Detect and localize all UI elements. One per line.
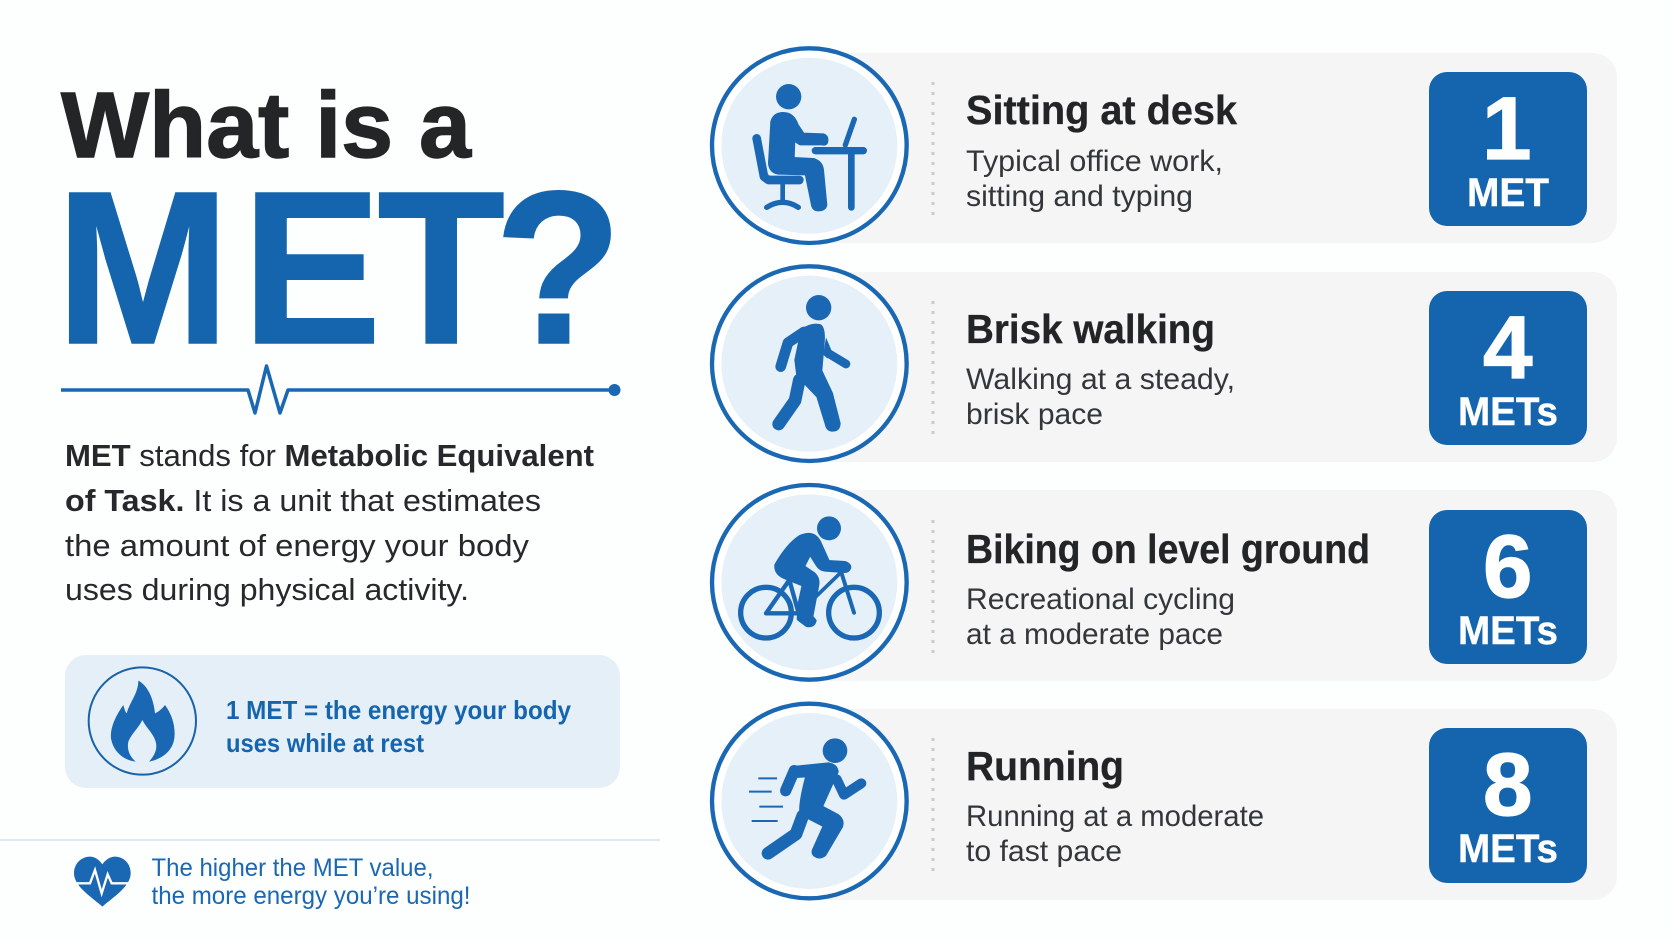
activity description: Running at a moderate xyxy=(966,800,1264,833)
activity description: Walking at a steady, xyxy=(966,363,1235,396)
footer note xyxy=(152,854,470,910)
MET badge: 1: 1 xyxy=(1482,78,1532,178)
MET badge: 1 xyxy=(1429,72,1587,226)
icon: runner xyxy=(712,704,907,898)
MET badge: 8: METs xyxy=(1458,827,1558,871)
MET badge: 4 xyxy=(1429,291,1587,445)
heartbeat divider xyxy=(61,366,620,413)
panel: biking on level ground xyxy=(712,485,1617,681)
activity title: Biking on level ground xyxy=(966,526,1370,572)
icon: cyclist xyxy=(712,485,907,680)
intro text block: of Task. It is a unit that estimates xyxy=(65,483,541,518)
MET badge: 4: 4 xyxy=(1483,297,1533,397)
intro text block: uses during physical activity. xyxy=(65,572,469,607)
panel: sitting at desk xyxy=(712,48,1617,243)
activity title: Brisk walking xyxy=(966,306,1215,352)
activity title: Sitting at desk xyxy=(966,87,1237,133)
activity description xyxy=(966,800,1264,868)
MET badge: 8 xyxy=(1429,728,1587,883)
panel: brisk walking xyxy=(712,266,1617,462)
MET badge: 6: 6 xyxy=(1483,516,1532,616)
icon: person at desk xyxy=(712,48,907,243)
icon: flame xyxy=(89,667,196,775)
callout panel: 1 MET definition xyxy=(65,655,620,788)
intro text block: the amount of energy your body xyxy=(65,528,530,563)
MET badge: 6 xyxy=(1429,510,1587,664)
MET badge: 1: MET xyxy=(1467,171,1549,215)
title: What is a: What is a xyxy=(61,73,472,177)
activity title: Running xyxy=(966,743,1124,789)
activity description xyxy=(966,363,1235,431)
activity description: brisk pace xyxy=(966,398,1103,431)
MET badge: 8: 8 xyxy=(1483,734,1532,834)
intro text block xyxy=(65,438,594,607)
activity description: sitting and typing xyxy=(966,180,1193,213)
activity description xyxy=(966,145,1223,213)
callout text: uses while at rest xyxy=(226,728,424,758)
activity description: Typical office work, xyxy=(966,145,1223,178)
footer note: the more energy you’re using! xyxy=(152,882,470,910)
callout text xyxy=(226,695,572,758)
activity description xyxy=(966,583,1235,651)
callout text: 1 MET = the energy your body xyxy=(226,695,572,725)
panel: running xyxy=(712,704,1617,900)
MET badge: 4: METs xyxy=(1458,390,1558,434)
activity description: to fast pace xyxy=(966,835,1122,868)
icon: heart with pulse xyxy=(74,857,131,907)
intro text block: MET stands for Metabolic Equivalent xyxy=(65,438,594,473)
icon: walking person xyxy=(712,266,907,461)
activity description: Recreational cycling xyxy=(966,583,1235,616)
activity description: at a moderate pace xyxy=(966,618,1223,651)
title: MET?: MET? xyxy=(56,147,622,390)
footer note: The higher the MET value, xyxy=(152,854,434,882)
MET badge: 6: METs xyxy=(1458,609,1558,653)
